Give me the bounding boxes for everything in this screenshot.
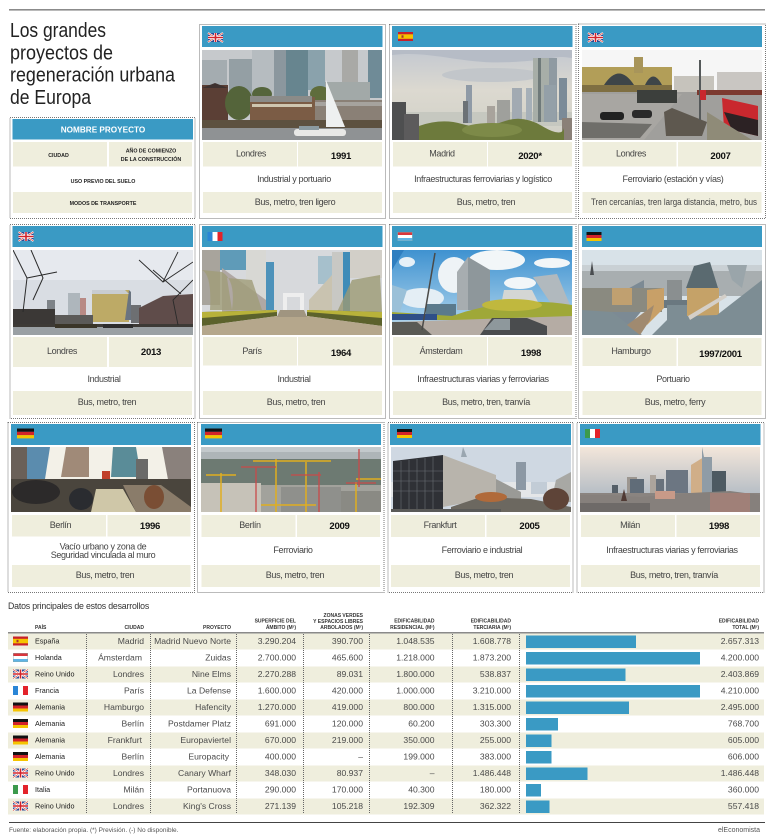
table row: Portanuova: 40.300 xyxy=(408,784,435,794)
city and year cells xyxy=(393,337,572,366)
panel: King's Cross xyxy=(578,24,766,218)
city and year cells xyxy=(12,515,190,536)
table row: Hafencity: 2.495.000 xyxy=(721,702,759,712)
photo: Berlín Europacity cranes xyxy=(201,447,381,512)
panel: La Defense xyxy=(200,224,386,418)
icon: UK flag xyxy=(588,33,603,42)
bar xyxy=(526,718,558,730)
city and year cells: 2005 xyxy=(519,521,541,532)
table row: La Defense: París xyxy=(124,686,144,696)
previous land use: Infraestructuras ferroviarias y logístico xyxy=(414,174,552,184)
table row: Madrid Nuevo Norte: 3.290.204 xyxy=(258,636,296,646)
icon: Italy flag xyxy=(585,429,600,438)
table row: Canary Wharf: Londres xyxy=(113,768,144,778)
transport modes xyxy=(582,391,762,415)
table row: Nine Elms: 538.837 xyxy=(480,669,511,679)
city and year cells xyxy=(203,337,382,366)
table column headers: TOTAL (M²) xyxy=(732,625,759,631)
table row: La Defense: 4.210.000 xyxy=(721,686,759,696)
table row: Europacity: – xyxy=(358,752,363,762)
panel: Hafencity xyxy=(578,224,766,418)
table column headers: EDIFICABILIDAD xyxy=(471,618,511,624)
table row: Hafencity: Alemania xyxy=(35,702,65,712)
table row: Portanuova: 290.000 xyxy=(265,784,296,794)
table row: Europaviertel: 350.000 xyxy=(403,735,435,745)
table row: Zuidas: Zuidas xyxy=(205,652,231,662)
icon: Germany flag xyxy=(205,428,222,438)
table row: Postdamer Platz: 768.700 xyxy=(728,718,759,728)
table row: Portanuova xyxy=(13,784,759,796)
table row: Nine Elms xyxy=(8,666,764,682)
table row: Europaviertel: Europaviertel xyxy=(180,735,231,745)
table row: Madrid Nuevo Norte: 1.608.778 xyxy=(473,636,511,646)
table row: Postdamer Platz: Berlín xyxy=(122,718,144,728)
table column headers: PAÍS xyxy=(35,623,47,631)
table row: King's Cross: Reino Unido xyxy=(35,802,75,810)
city and year cells xyxy=(203,142,382,166)
table row: Nine Elms: 2.270.288 xyxy=(258,669,296,679)
bar xyxy=(526,685,700,698)
table row: Europacity: Europacity xyxy=(188,752,230,762)
photo: King's Cross station xyxy=(582,50,762,140)
transport modes: Bus, metro, tren xyxy=(266,570,325,580)
transport modes: Bus, metro, tren xyxy=(78,397,137,407)
table column headers: ZONAS VERDES xyxy=(324,613,364,619)
city and year cells: Londres xyxy=(616,148,647,158)
table row: King's Cross xyxy=(8,798,764,814)
city and year cells: Berlín xyxy=(50,520,72,530)
transport modes xyxy=(393,192,572,213)
transport modes xyxy=(391,565,570,587)
previous land use xyxy=(51,542,156,560)
table row: Europacity: Alemania xyxy=(35,752,65,761)
bar xyxy=(526,800,550,813)
table row: Postdamer Platz: 303.300 xyxy=(480,718,511,728)
table row: Madrid Nuevo Norte: 1.048.535 xyxy=(396,636,435,646)
table row: Europaviertel: 255.000 xyxy=(480,735,511,745)
transport modes: Bus, metro, tren xyxy=(267,397,326,407)
icon: Germany flag xyxy=(397,429,412,438)
transport modes: Bus, metro, tren ligero xyxy=(255,197,336,207)
table row: Nine Elms: 1.800.000 xyxy=(396,669,435,679)
table row: Portanuova: 360.000 xyxy=(728,784,759,794)
table row: King's Cross: 192.309 xyxy=(403,801,435,811)
previous land use: Seguridad vinculada al muro xyxy=(51,550,156,560)
city and year cells: Milán xyxy=(620,520,640,530)
city and year cells: 2009 xyxy=(329,521,350,532)
table row: Nine Elms: 89.031 xyxy=(337,669,363,679)
panel: legend card: USO PREVIO DEL SUELO xyxy=(71,179,135,185)
table row: Europaviertel: 605.000 xyxy=(728,735,759,745)
icon: UK flag xyxy=(18,232,34,241)
table row: Europaviertel: 219.000 xyxy=(332,735,363,745)
table row: La Defense: 3.210.000 xyxy=(473,686,511,696)
table column headers: RESIDENCIAL (M²) xyxy=(390,625,435,631)
panel: Postdamer Platz xyxy=(8,422,194,592)
table row: La Defense: 1.000.000 xyxy=(396,686,435,696)
table column headers: SUPERFICIE DEL xyxy=(255,618,296,624)
previous land use: Industrial y portuario xyxy=(257,174,331,184)
icon: France flag xyxy=(208,232,222,241)
table column headers: PROYECTO xyxy=(203,625,231,631)
city and year cells: 1997/2001 xyxy=(699,349,743,360)
previous land use: Infraestructuras viarias y ferroviarias xyxy=(417,374,550,384)
photo: París La Défense xyxy=(202,250,382,335)
previous land use: Ferroviario (estación y vías) xyxy=(623,174,724,184)
table column headers xyxy=(35,613,759,631)
transport modes: Bus, metro, tren xyxy=(457,197,516,207)
table row: Europacity: 400.000 xyxy=(265,752,296,762)
table row: Portanuova: 170.000 xyxy=(332,784,363,794)
table row: King's Cross: King's Cross xyxy=(183,801,231,811)
table row: Madrid Nuevo Norte: España xyxy=(35,636,59,646)
title: regeneración urbana xyxy=(10,64,176,86)
table row: Canary Wharf: Canary Wharf xyxy=(178,768,232,778)
transport modes: Bus, metro, tren, tranvía xyxy=(442,397,530,407)
table row: Postdamer Platz: 60.200 xyxy=(408,718,435,728)
table column headers: ÁMBITO (M²) xyxy=(266,624,296,631)
title: Los grandes xyxy=(10,20,106,42)
transport modes xyxy=(12,565,190,587)
transport modes xyxy=(203,192,382,213)
table row: Zuidas: 2.700.000 xyxy=(258,652,296,662)
previous land use: Industrial xyxy=(87,374,121,384)
bar xyxy=(526,784,541,796)
panel: Portanuova xyxy=(577,422,764,592)
bar xyxy=(526,734,552,747)
photo: Hamburgo Hafencity xyxy=(582,250,762,335)
table row: King's Cross: 362.322 xyxy=(480,801,511,811)
panel: Nine Elms, Londres xyxy=(200,24,386,218)
city and year cells: Hamburgo xyxy=(611,346,651,356)
table row: Nine Elms: 2.403.869 xyxy=(721,669,759,679)
panel: legend card: CIUDAD xyxy=(48,153,69,159)
table row: Hafencity: 419.000 xyxy=(332,702,363,712)
city and year cells xyxy=(582,142,762,166)
table row: Portanuova: 180.000 xyxy=(480,784,511,794)
table row: La Defense: La Defense xyxy=(187,686,231,696)
city and year cells xyxy=(202,515,380,537)
panel: legend card: DE LA CONSTRUCCIÓN xyxy=(121,155,181,163)
transport modes: Bus, metro, tren xyxy=(455,570,514,580)
table row: Portanuova: Portanuova xyxy=(187,784,231,794)
table row: Europacity: 199.000 xyxy=(403,752,435,762)
city and year cells: Ámsterdam xyxy=(420,346,462,356)
icon: Spain flag xyxy=(398,32,413,41)
table row: Hafencity: Hafencity xyxy=(195,702,232,712)
table row: La Defense: 420.000 xyxy=(332,686,363,696)
bar xyxy=(526,768,588,780)
transport modes xyxy=(202,565,380,587)
photo: Berlín Potsdamer Platz xyxy=(11,447,191,512)
table row: Hafencity: 1.270.000 xyxy=(258,702,296,712)
source note: Fuente: elaboración propia. (*) Previsión. (-) No disponible. xyxy=(9,827,179,834)
table row: Hafencity xyxy=(8,700,764,716)
city and year cells xyxy=(581,515,760,537)
icon: UK flag xyxy=(208,33,223,42)
table row: Europaviertel: 670.000 xyxy=(265,735,296,745)
table row: Canary Wharf: 1.486.448 xyxy=(473,768,511,778)
transport modes xyxy=(203,391,382,415)
bar xyxy=(526,751,552,764)
table row: La Defense: Francia xyxy=(35,686,59,695)
icon: Germany flag xyxy=(586,232,602,241)
table row: Postdamer Platz: Alemania xyxy=(35,719,65,728)
city and year cells: 2013 xyxy=(141,347,161,358)
table heading: Datos principales de estos desarrollos xyxy=(8,601,150,611)
photo: Londres Canary Wharf xyxy=(13,250,193,335)
panel: legend card: MODOS DE TRANSPORTE xyxy=(70,201,137,207)
previous land use: Ferroviario xyxy=(273,545,313,555)
table row: King's Cross: 271.139 xyxy=(265,801,296,811)
table row: Madrid Nuevo Norte: Madrid Nuevo Norte xyxy=(154,636,231,646)
city and year cells: 2020* xyxy=(518,151,542,162)
city and year cells: Londres xyxy=(47,346,78,356)
previous land use: Infraestructuras viarias y ferroviarias xyxy=(606,545,739,555)
table row: Canary Wharf: 80.937 xyxy=(337,768,363,778)
panel: Europaviertel xyxy=(388,422,573,592)
table row: Portanuova: Milán xyxy=(123,784,144,794)
table row: Europacity xyxy=(13,751,759,764)
table row: Canary Wharf: 348.030 xyxy=(265,768,296,778)
table row: Zuidas: 4.200.000 xyxy=(721,652,759,662)
table row: Canary Wharf: – xyxy=(430,768,435,778)
table row: Canary Wharf: Reino Unido xyxy=(35,768,75,778)
table row: King's Cross: 557.418 xyxy=(728,801,759,811)
table row: La Defense xyxy=(13,685,759,698)
table row: Zuidas: 1.873.200 xyxy=(473,652,511,662)
previous land use: Industrial xyxy=(277,374,311,384)
table column headers: ARBOLADOS (M²) xyxy=(320,625,363,631)
table row: Zuidas: Holanda xyxy=(35,653,62,662)
table row: La Defense: 1.600.000 xyxy=(258,686,296,696)
photo: Londres Nine Elms xyxy=(202,50,382,140)
transport modes: Bus, metro, ferry xyxy=(645,397,706,407)
table row: Europacity: Berlín xyxy=(122,752,144,762)
city and year cells xyxy=(13,337,192,367)
transport modes xyxy=(581,565,760,587)
panel: Madrid Nuevo Norte xyxy=(390,24,576,218)
previous land use: Ferroviario e industrial xyxy=(442,545,523,555)
bar xyxy=(526,636,636,648)
title xyxy=(10,20,176,109)
table row: Europacity: 606.000 xyxy=(728,752,759,762)
bar xyxy=(526,702,629,714)
table row: Hafencity: 1.315.000 xyxy=(473,702,511,712)
table row: King's Cross: 105.218 xyxy=(332,801,363,811)
table row: Zuidas xyxy=(13,652,759,664)
transport modes xyxy=(582,192,762,213)
table column headers: EDIFICABILIDAD xyxy=(719,618,759,624)
title: de Europa xyxy=(10,87,92,109)
table row: Madrid Nuevo Norte: 2.657.313 xyxy=(721,636,759,646)
panel: legend card xyxy=(10,118,195,218)
panel: Europacity xyxy=(198,422,384,592)
previous land use: Portuario xyxy=(656,374,690,384)
table row: Hafencity: 800.000 xyxy=(403,702,435,712)
city and year cells: París xyxy=(242,346,262,356)
transport modes: Bus, metro, tren, tranvía xyxy=(630,570,718,580)
table row: Canary Wharf xyxy=(8,766,764,782)
table row: Hafencity: Hamburgo xyxy=(104,702,144,712)
table column headers: EDIFICABILIDAD xyxy=(394,618,435,624)
table row: Nine Elms: Londres xyxy=(113,669,144,679)
city and year cells: 1996 xyxy=(140,521,160,532)
panel: legend card: NOMBRE PROYECTO xyxy=(61,126,146,134)
table row: Postdamer Platz: Postdamer Platz xyxy=(168,718,231,728)
city and year cells: 1998 xyxy=(709,521,730,532)
table row: Postdamer Platz: 691.000 xyxy=(265,718,296,728)
table row: King's Cross: Londres xyxy=(113,801,144,811)
photo: Milán Portanuova xyxy=(580,447,760,512)
city and year cells: 2007 xyxy=(710,151,731,162)
photo: Ámsterdam Zuidas xyxy=(392,250,572,335)
table row: Europaviertel: Frankfurt xyxy=(108,735,143,745)
table row: Europacity: 383.000 xyxy=(480,752,511,762)
table column headers: TERCIARIA (M²) xyxy=(473,625,511,631)
city and year cells: Madrid xyxy=(429,148,455,158)
city and year cells xyxy=(393,142,572,166)
photo: Frankfurt Europaviertel xyxy=(391,447,571,512)
bar xyxy=(526,668,626,681)
city and year cells: Londres xyxy=(236,148,267,158)
table row: Madrid Nuevo Norte xyxy=(8,634,764,650)
city and year cells: 1991 xyxy=(331,151,352,162)
table row: Europaviertel xyxy=(8,732,764,748)
table row: Zuidas: 465.600 xyxy=(332,652,363,662)
table row: Postdamer Platz: 120.000 xyxy=(332,718,363,728)
table column headers: CIUDAD xyxy=(125,625,144,631)
table row: Zuidas: Ámsterdam xyxy=(98,652,142,662)
panel: legend card: AÑO DE COMIENZO xyxy=(126,148,176,154)
bar xyxy=(526,652,700,664)
transport modes xyxy=(393,391,572,415)
panel: Canary Wharf xyxy=(10,224,195,418)
city and year cells xyxy=(582,338,762,366)
table row: Nine Elms: Reino Unido xyxy=(35,670,75,678)
photo: Madrid xyxy=(392,50,572,140)
panel: Zuidas xyxy=(390,224,576,418)
icon: Germany flag xyxy=(17,428,34,438)
previous land use: Vacío urbano y zona de xyxy=(60,542,147,552)
credit: elEconomista: elEconomista xyxy=(718,827,760,834)
city and year cells: 1998 xyxy=(521,348,542,359)
table row: Portanuova: Italia xyxy=(35,785,50,794)
transport modes xyxy=(13,391,192,415)
table row: Europaviertel: Alemania xyxy=(35,736,65,744)
table row: Zuidas: 1.218.000 xyxy=(396,652,435,662)
table row: Madrid Nuevo Norte: Madrid xyxy=(118,636,144,646)
city and year cells xyxy=(391,515,570,537)
city and year cells: Frankfurt xyxy=(424,520,457,530)
title: proyectos de xyxy=(10,42,113,64)
table column headers: Y ESPACIOS LIBRES xyxy=(313,619,364,625)
table row: Canary Wharf: 1.486.448 xyxy=(721,768,759,778)
table row: Postdamer Platz xyxy=(13,718,759,730)
city and year cells: 1964 xyxy=(331,348,352,359)
city and year cells: Berlín xyxy=(239,520,261,530)
icon: Netherlands flag xyxy=(398,232,412,241)
table row: Madrid Nuevo Norte: 390.700 xyxy=(332,636,363,646)
table row: Nine Elms: Nine Elms xyxy=(192,669,231,679)
transport modes: Bus, metro, tren xyxy=(76,570,135,580)
